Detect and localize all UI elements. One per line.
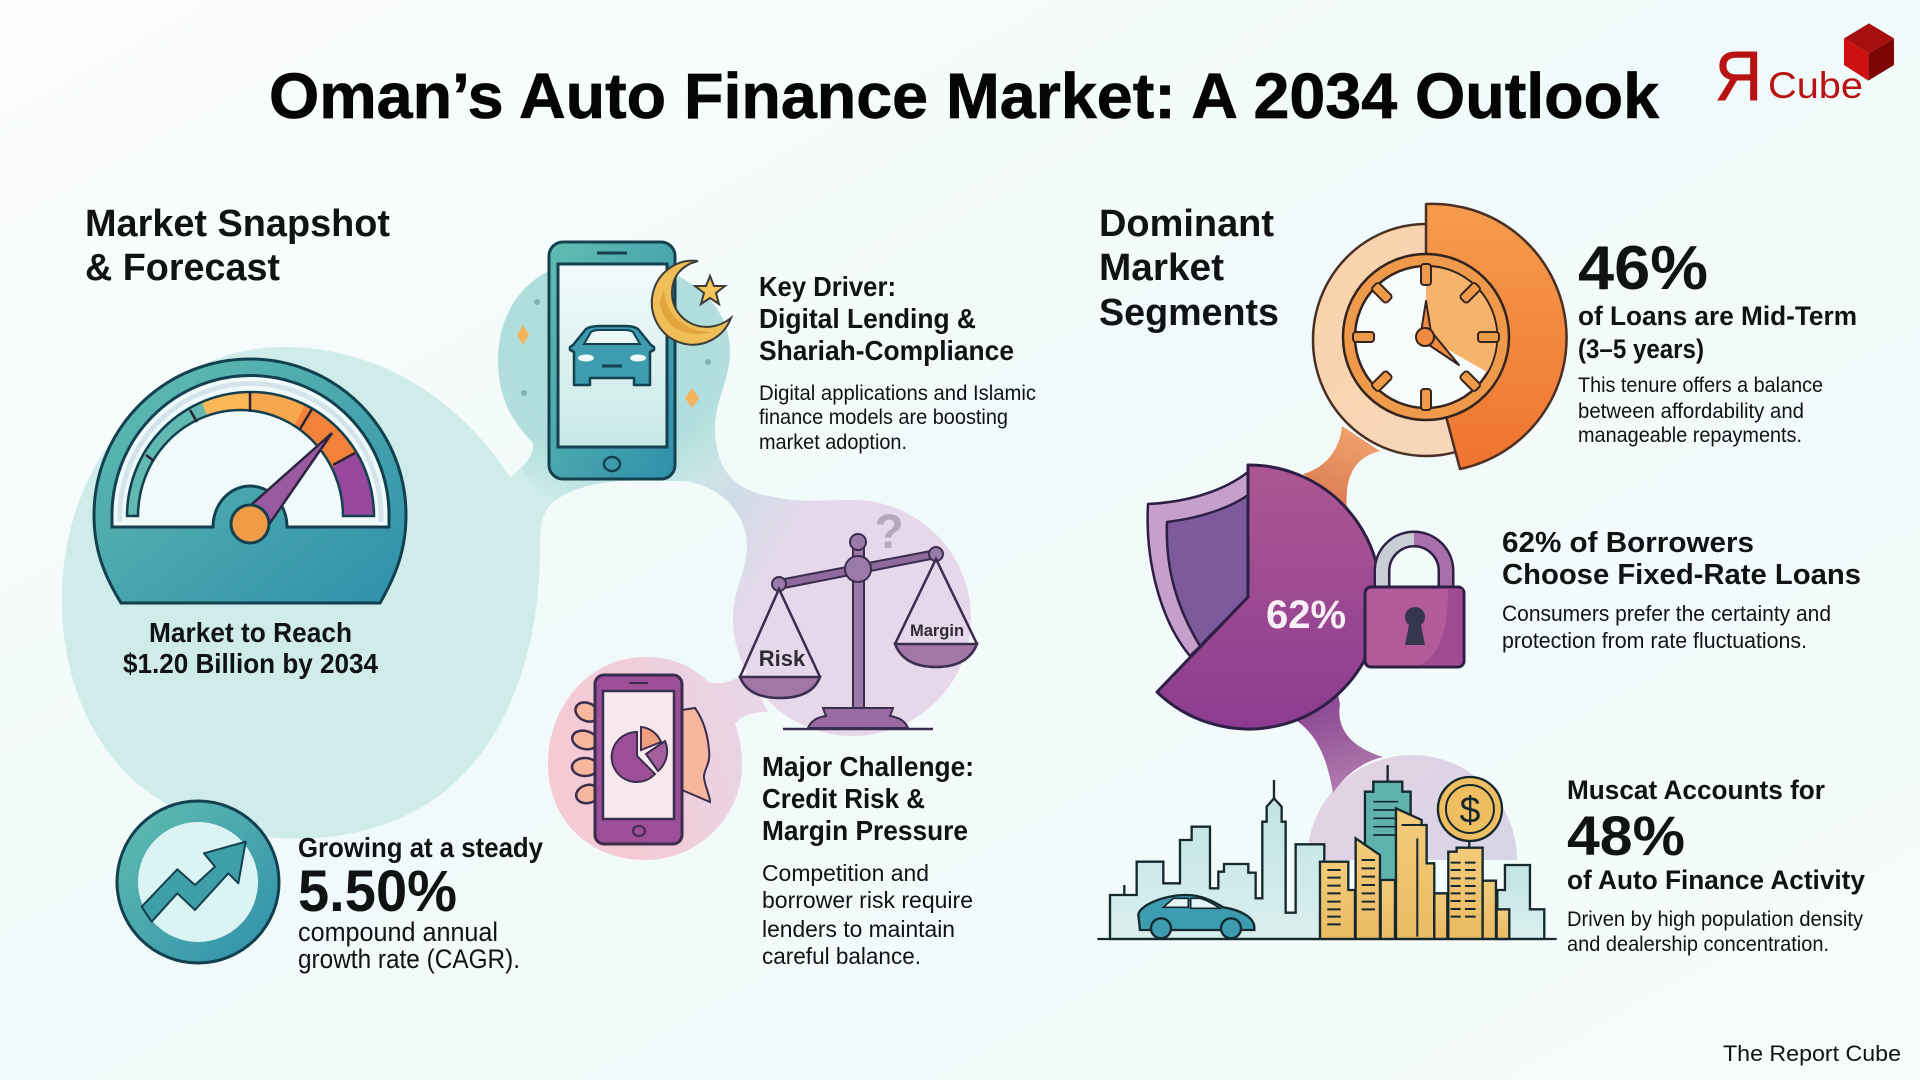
gauge icon — [94, 359, 406, 603]
pink circle with connector — [548, 657, 768, 860]
right light building — [1497, 865, 1544, 939]
right pan: margin — [895, 559, 977, 667]
gauge ticks — [146, 392, 355, 465]
text: fixed-rate: Choose Fixed-Rate Loans — [1502, 559, 1861, 591]
scale pole and base — [783, 728, 933, 730]
clock ring — [1343, 254, 1509, 420]
text: key driver: market adoption. — [759, 431, 907, 454]
right pan: margin: Margin — [910, 622, 964, 640]
flowing blob: teal connecting to purple — [62, 260, 971, 839]
left pan: risk: Risk — [759, 646, 806, 671]
gauge body — [94, 359, 406, 603]
gauge hub — [231, 505, 269, 543]
text: major challenge: Major Challenge: — [762, 751, 974, 782]
text: Muscat: 48% — [1567, 804, 1685, 867]
logo cube — [1844, 23, 1894, 81]
text: major challenge: Credit Risk & — [762, 783, 925, 814]
spire — [1124, 780, 1274, 895]
text: fixed-rate: Consumers prefer the certainty and — [1502, 601, 1831, 626]
text: major challenge: borrower risk require — [762, 887, 973, 913]
icon: phone with car — [549, 242, 675, 479]
gauge inner rim — [120, 383, 381, 522]
scale beam — [779, 550, 936, 589]
light city buildings — [1110, 798, 1324, 939]
heading: market snapshot: Market Snapshot — [85, 203, 390, 245]
gauge caption: $1.20 Billion by 2034 — [123, 648, 378, 679]
shield — [1148, 472, 1248, 656]
tower window lines — [1373, 802, 1398, 835]
logo mark letter: Я — [1715, 37, 1762, 115]
gauge scale band — [128, 393, 373, 515]
left pan: risk — [740, 589, 820, 698]
gauge band outline — [127, 392, 374, 516]
icon: growth arrow — [117, 801, 279, 963]
text: Muscat — [1567, 775, 1865, 956]
clock ticks — [1353, 264, 1499, 410]
text: major challenge: Margin Pressure — [762, 815, 968, 846]
text: key driver — [759, 271, 1036, 454]
hand — [682, 708, 710, 802]
heading: dominant market segments — [1099, 203, 1279, 334]
text: fixed-rate: protection from rate fluctuations. — [1502, 628, 1807, 653]
phone circle tint — [498, 272, 730, 494]
text: CAGR: compound annual — [298, 917, 498, 947]
skyline backing circle — [1308, 755, 1517, 860]
teal tower — [1365, 765, 1411, 880]
car front — [570, 326, 654, 385]
text: key driver: Digital Lending & — [759, 303, 976, 334]
icon: hand with phone chart — [570, 675, 710, 844]
gauge needle — [251, 433, 332, 523]
heading: market snapshot — [85, 203, 390, 289]
clock share sector — [1426, 204, 1567, 469]
lock shade — [1420, 589, 1462, 665]
text: 46% mid-term: (3–5 years) — [1578, 334, 1704, 364]
gold buildings — [1320, 808, 1509, 939]
text: fixed-rate — [1502, 527, 1861, 653]
clock light ring — [1313, 224, 1539, 456]
text: key driver: Key Driver: — [759, 271, 896, 302]
heading: dominant market segments: Segments — [1099, 292, 1279, 334]
icon: crescent and star — [652, 261, 731, 345]
icon: Muscat skyline with car and coin — [1097, 765, 1557, 939]
text: Muscat: of Auto Finance Activity — [1567, 865, 1865, 895]
text: CAGR: Growing at a steady — [298, 832, 543, 863]
text: key driver: Digital applications and Islamic — [759, 382, 1036, 405]
heading: dominant market segments: Market — [1099, 247, 1224, 289]
text: Muscat: and dealership concentration. — [1567, 933, 1829, 956]
fingers — [570, 699, 602, 806]
text: 46% mid-term: 46% — [1578, 234, 1708, 303]
text: 46% mid-term: manageable repayments. — [1578, 424, 1802, 447]
connector: clock to shield — [1303, 426, 1380, 508]
text: key driver: Shariah-Compliance — [759, 335, 1014, 366]
text: CAGR — [298, 832, 543, 974]
text: 46% mid-term: This tenure offers a balance — [1578, 374, 1823, 397]
text: major challenge: careful balance. — [762, 943, 921, 969]
pie chart — [612, 727, 667, 782]
text: 46% mid-term: of Loans are Mid-Term — [1578, 301, 1857, 331]
logo: RCube — [1715, 23, 1894, 115]
icon: clock with 46% share — [1313, 204, 1567, 469]
question mark: ? — [874, 506, 904, 559]
pie label: 62% — [1266, 593, 1346, 637]
gauge caption — [123, 617, 378, 679]
text: CAGR: growth rate (CAGR). — [298, 944, 520, 974]
logo word: Cube — [1768, 65, 1863, 106]
footer credit: The Report Cube — [1723, 1041, 1901, 1066]
pie 62% — [1157, 465, 1381, 729]
gauge window — [112, 375, 389, 527]
text: major challenge — [762, 751, 974, 969]
connector: pie to skyline — [1290, 680, 1383, 793]
text: major challenge: lenders to maintain — [762, 916, 955, 942]
heading: dominant market segments: Dominant — [1099, 203, 1274, 245]
text: 46% mid-term: between affordability and — [1578, 400, 1804, 423]
keyhole — [1405, 607, 1425, 645]
title: Oman’s Auto Finance Market: A 2034 Outlook — [269, 60, 1659, 132]
phone — [595, 675, 682, 844]
icon: padlock — [1365, 539, 1464, 667]
text: key driver: finance models are boosting — [759, 406, 1008, 429]
gauge caption: Market to Reach — [149, 617, 352, 648]
clock hands — [1416, 301, 1459, 365]
text: major challenge: Competition and — [762, 860, 929, 886]
icon: balance scale — [740, 506, 977, 729]
coin: $ — [1460, 789, 1481, 831]
sparkles around phone — [517, 299, 711, 408]
ground line — [1097, 935, 1557, 942]
gold window lines — [1327, 825, 1476, 937]
car — [1138, 895, 1254, 938]
coin — [1438, 777, 1502, 848]
text: Muscat: Driven by high population density — [1567, 908, 1863, 931]
text: fixed-rate: 62% of Borrowers — [1502, 527, 1754, 559]
heading: market snapshot: & Forecast — [85, 247, 280, 289]
icon: shield with 62% pie — [1148, 465, 1381, 729]
clock face — [1355, 266, 1497, 408]
text: CAGR: 5.50% — [298, 859, 457, 924]
text: 46% mid-term — [1578, 234, 1857, 447]
text: Muscat: Muscat Accounts for — [1567, 775, 1825, 805]
